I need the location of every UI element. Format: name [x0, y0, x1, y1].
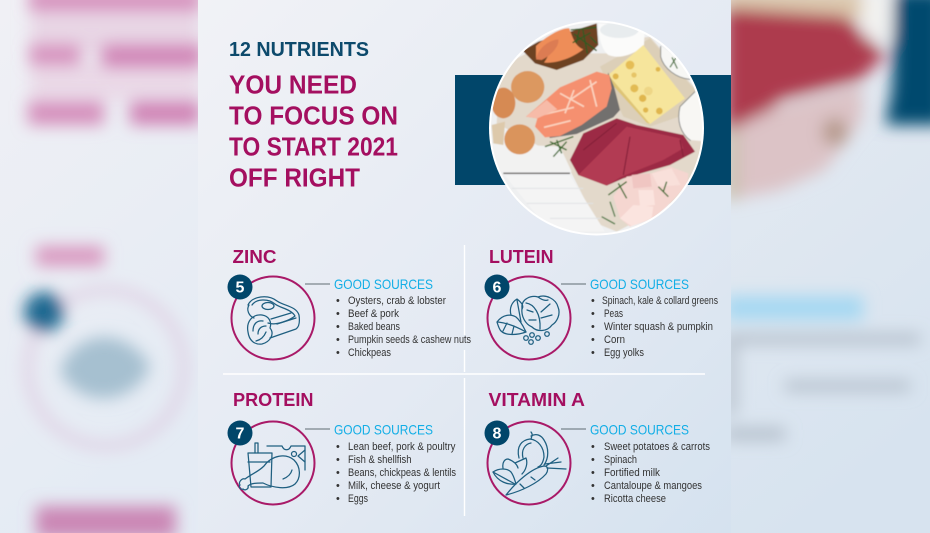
good sources: lutein: Corn: [604, 334, 625, 346]
good sources: zinc: [334, 276, 471, 359]
good sources: protein: •: [336, 493, 340, 505]
good sources: protein: Fish & shellfish: [348, 454, 412, 466]
good sources: vitamin a: •: [591, 454, 595, 466]
shrimp: [536, 28, 583, 63]
good sources: lutein: GOOD SOURCES: [590, 276, 689, 292]
heading: lutein: LUTEIN: [489, 246, 554, 267]
good sources: vitamin a: •: [591, 480, 595, 492]
good sources: protein: Milk, cheese & yogurt: [348, 480, 440, 492]
small bowls: [660, 50, 686, 78]
good sources: zinc: Beef & pork: [348, 308, 400, 320]
badge 5: [228, 274, 252, 300]
icon: steak and oyster: [232, 276, 314, 360]
panel: protein: [228, 389, 457, 505]
title: TO FOCUS ON: [229, 102, 398, 130]
good sources: vitamin a: •: [591, 441, 595, 453]
good sources: lutein: •: [591, 334, 595, 346]
badge 8: [484, 420, 510, 446]
good sources: lutein: Spinach, kale & collard greens: [602, 295, 718, 307]
wooden bowl: [523, 23, 598, 70]
seeds: [492, 122, 505, 145]
good sources: zinc: •: [336, 308, 340, 320]
good sources: zinc: Chickpeas: [348, 347, 392, 359]
good sources: vitamin a: •: [591, 467, 595, 479]
icon: chicken leg, cheese and milk: [232, 422, 314, 504]
blurred left side panel: [0, 0, 202, 533]
good sources: protein: Beans, chickpeas & lentils: [348, 467, 457, 479]
good sources: zinc: •: [336, 347, 340, 359]
good sources: protein: [334, 422, 457, 505]
good sources: protein: GOOD SOURCES: [334, 422, 433, 438]
good sources: zinc: •: [336, 295, 340, 307]
good sources: protein: •: [336, 480, 340, 492]
good sources: vitamin a: Ricotta cheese: [604, 493, 666, 505]
navy band behind photo: [455, 75, 731, 185]
good sources: vitamin a: [590, 422, 711, 505]
good sources: lutein: •: [591, 347, 595, 359]
icon: carrot, spinach and squash: [488, 422, 570, 504]
panel: vitamin a: [484, 389, 711, 505]
icon: cabbage and leaves: [488, 276, 570, 360]
good sources: vitamin a: Spinach: [604, 454, 637, 466]
title: [229, 38, 398, 192]
good sources: zinc: Oysters, crab & lobster: [348, 295, 446, 307]
panel: lutein: [484, 246, 718, 360]
dividers: [223, 245, 705, 516]
good sources: lutein: •: [591, 321, 595, 333]
good sources: lutein: •: [591, 308, 595, 320]
good sources: zinc: GOOD SOURCES: [334, 276, 433, 292]
milk cup: [598, 23, 645, 57]
badge 5: 5: [236, 280, 245, 296]
eggs: [511, 71, 544, 103]
title: OFF RIGHT: [229, 164, 360, 192]
good sources: lutein: •: [591, 295, 595, 307]
title: TO START 2021: [229, 134, 398, 162]
chicken: [613, 167, 688, 227]
good sources: protein: •: [336, 467, 340, 479]
badge 6: 6: [493, 280, 502, 296]
title: 12 NUTRIENTS: [229, 38, 369, 61]
beef: [570, 118, 695, 186]
good sources: lutein: Egg yolks: [604, 347, 645, 359]
blurred right side panel: [725, 0, 930, 533]
good sources: zinc: •: [336, 334, 340, 346]
parchment: [497, 37, 703, 232]
cheese: [608, 45, 685, 124]
good sources: protein: •: [336, 441, 340, 453]
heading: vitamin a: VITAMIN A: [488, 389, 585, 410]
good sources: vitamin a: Fortified milk: [604, 467, 661, 479]
heading: protein: PROTEIN: [233, 389, 314, 410]
badge 8: 8: [493, 426, 502, 442]
good sources: vitamin a: •: [591, 493, 595, 505]
good sources: vitamin a: Cantaloupe & mangoes: [604, 480, 703, 492]
badge 7: 7: [236, 426, 245, 442]
heading: zinc: ZINC: [232, 246, 276, 267]
main panel background: [198, 0, 731, 533]
good sources: protein: Eggs: [348, 493, 368, 505]
good sources: lutein: Peas: [604, 308, 623, 320]
good sources: zinc: Pumpkin seeds & cashew nuts: [348, 334, 471, 346]
title: YOU NEED: [229, 72, 357, 100]
panel: zinc: [228, 246, 471, 360]
badge 6: [484, 274, 510, 300]
food photo circle: [487, 18, 710, 238]
good sources: vitamin a: Sweet potatoes & carrots: [604, 441, 711, 453]
good sources: vitamin a: GOOD SOURCES: [590, 422, 689, 438]
good sources: zinc: Baked beans: [348, 321, 400, 333]
good sources: protein: •: [336, 454, 340, 466]
salmon steak: [540, 73, 620, 138]
good sources: lutein: Winter squash & pumpkin: [604, 321, 713, 333]
badge 7: [228, 420, 252, 446]
good sources: lutein: [590, 276, 718, 359]
good sources: protein: Lean beef, pork & poultry: [348, 441, 456, 453]
good sources: zinc: •: [336, 321, 340, 333]
